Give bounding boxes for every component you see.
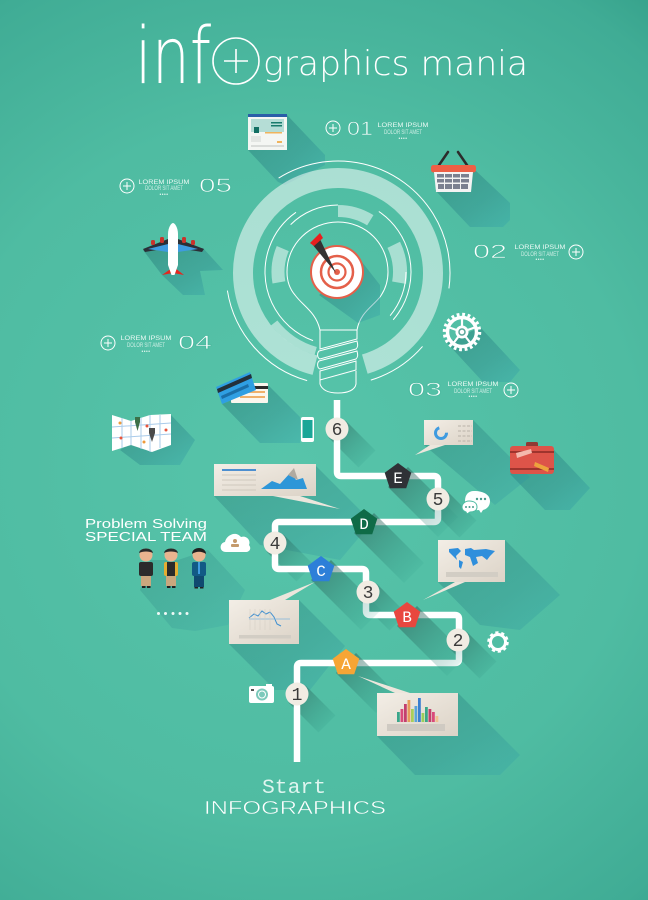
long shadows of icons: [120, 115, 590, 775]
pentagon B: [394, 602, 420, 627]
node 3: 3: [363, 584, 373, 604]
icon: speech bubbles: [462, 491, 490, 514]
card: bar chart: [358, 676, 458, 736]
label 01: ••••: [398, 136, 408, 142]
label 05: ••••: [159, 192, 169, 198]
title: [135, 12, 528, 102]
person 3: [192, 548, 206, 588]
node 6: [326, 418, 348, 441]
start label: [204, 777, 386, 818]
label 02: LOREM IPSUM: [514, 244, 566, 251]
person 2: [164, 548, 178, 588]
node 1: [286, 682, 308, 706]
label 03: [408, 380, 518, 401]
node 5: [426, 488, 450, 511]
pentagon A: [333, 649, 359, 674]
bulb outline and screw base: [287, 222, 388, 393]
text: special team: SPECIAL TEAM: [85, 529, 207, 544]
node 2: 2: [453, 632, 463, 652]
label 05: DOLOR SIT AMET: [145, 186, 183, 192]
card: mountain chart: [214, 464, 340, 509]
label 04: [101, 333, 213, 355]
inner ring segments: [238, 173, 438, 373]
icon: cloud: [221, 534, 250, 552]
node 3: [356, 580, 380, 604]
pentagon B: B: [402, 609, 412, 627]
team of people: [139, 548, 206, 588]
pentagon E: [385, 463, 411, 488]
title plus circle: [213, 38, 259, 84]
label 04: LOREM IPSUM: [120, 335, 172, 342]
card: donut chart: [415, 420, 473, 455]
label 04: 04: [178, 333, 213, 354]
light bulb diagram: [180, 115, 496, 431]
pentagon C: [308, 556, 334, 581]
card: world map: [423, 540, 505, 600]
text: start: Start: [262, 777, 326, 800]
label 05: LOREM IPSUM: [138, 179, 190, 186]
dots: [157, 612, 188, 615]
pentagon D: D: [359, 516, 369, 534]
label 04: DOLOR SIT AMET: [127, 343, 165, 349]
icon: camera: [249, 684, 274, 703]
node 6: 6: [332, 421, 342, 441]
label 03: LOREM IPSUM: [448, 381, 498, 388]
icon: target with dart: [310, 233, 363, 298]
node 4: 4: [270, 535, 280, 555]
icon: suitcase: [510, 442, 554, 474]
label 05: 05: [199, 176, 232, 197]
label 02: [473, 242, 583, 263]
title word: inf: inf: [135, 12, 211, 102]
route line: [275, 400, 459, 762]
icon: airplane: [143, 223, 204, 275]
title words: graphics mania: graphics mania: [263, 44, 528, 84]
node 1: 1: [292, 686, 302, 706]
thin outer arcs: [180, 115, 496, 431]
label 02: ••••: [535, 257, 545, 263]
label 04: ••••: [141, 349, 151, 355]
text: problem solving: Problem Solving: [85, 516, 207, 531]
card: line chart: [229, 582, 315, 644]
label 01: [326, 119, 428, 142]
icon: smartphone: [301, 417, 314, 442]
pentagon shadows: [311, 467, 467, 713]
label 01: 01: [347, 119, 373, 140]
label 01: LOREM IPSUM: [378, 122, 428, 129]
label 03: DOLOR SIT AMET: [454, 389, 492, 395]
problem solving heading: [85, 516, 207, 544]
label 03: 03: [408, 380, 442, 401]
pentagon E: E: [393, 470, 403, 488]
label 02: DOLOR SIT AMET: [521, 252, 559, 258]
label 02: 02: [473, 242, 507, 263]
icon: folded map: [112, 414, 171, 452]
node 2: [446, 628, 470, 652]
label 05: [120, 176, 232, 198]
icon: small gear: [488, 632, 508, 652]
icon: shopping basket: [431, 152, 476, 192]
pentagon C: C: [316, 563, 326, 581]
person 1: [139, 548, 153, 588]
target shadow: [319, 262, 380, 323]
pentagon A: A: [341, 656, 351, 674]
outer band ring: [223, 158, 453, 388]
icon: browser window: [248, 114, 287, 150]
node 4: [264, 532, 286, 555]
label 01: DOLOR SIT AMET: [384, 130, 422, 136]
route path shadows: [266, 420, 496, 732]
label 03: ••••: [468, 394, 478, 400]
text: infographics: INFOGRAPHICS: [204, 798, 386, 818]
pentagon D: [351, 509, 377, 534]
icon: credit cards: [216, 372, 268, 404]
node 5: 5: [433, 491, 443, 511]
icon: large gear: [444, 314, 480, 350]
